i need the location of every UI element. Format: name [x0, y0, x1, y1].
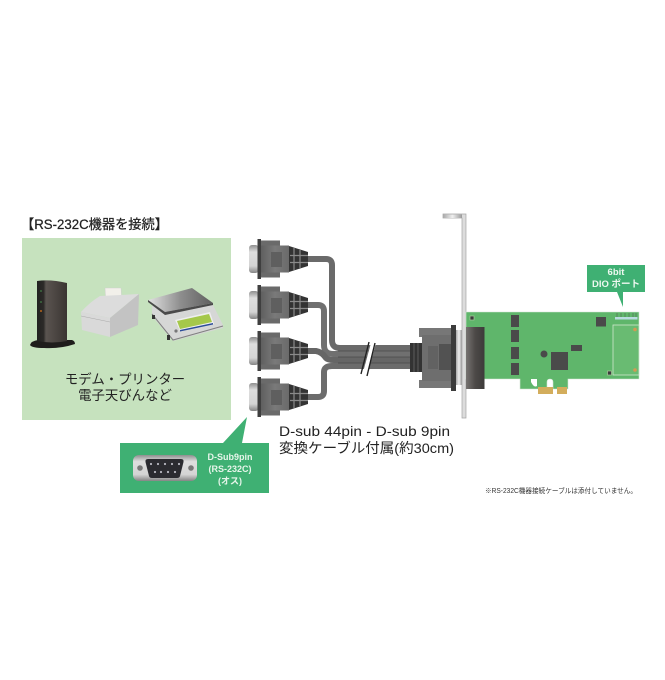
- icon: modem: [30, 280, 75, 348]
- note: ※RS-232C機器接続ケーブルは添付していません。: [485, 486, 637, 495]
- text: device names: [65, 371, 185, 403]
- callout: DIO port: DIO ポート: [592, 279, 640, 290]
- cables: [306, 259, 412, 397]
- text: cable description: [279, 423, 454, 456]
- text: cable description: D-sub 44pin - D-sub 9pin: [279, 423, 450, 439]
- connector: port 2: [249, 285, 308, 325]
- text: device names: 電子天びんなど: [78, 388, 172, 403]
- pcb board: [466, 312, 639, 394]
- cable break mark: [361, 342, 376, 376]
- small mounts: [470, 316, 612, 375]
- icon: D-sub connector: [133, 455, 197, 481]
- callout: D-Sub9pin: [120, 417, 269, 493]
- chips: [511, 315, 606, 375]
- black connector: [466, 327, 484, 389]
- connector: port 3: [249, 331, 308, 371]
- connector: port 1: [249, 239, 308, 279]
- DIO area: [613, 325, 639, 375]
- DIO header: [615, 317, 638, 320]
- callout: DIO port: [587, 265, 645, 307]
- text: cable description: 変換ケーブル付属(約30cm): [279, 440, 454, 456]
- connector: port 4: [249, 377, 308, 417]
- heading: RS-232C devices: 【RS-232C機器を接続】: [21, 216, 168, 232]
- callout: D-Sub9pin: D-Sub9pin: [208, 452, 252, 462]
- icon: weighing scale: [148, 288, 223, 341]
- gold fingers: [538, 387, 567, 394]
- icon: printer: [81, 288, 139, 337]
- bracket: [443, 214, 466, 418]
- callout: D-Sub9pin: (RS-232C): [208, 464, 252, 474]
- callout: DIO port: 6bit: [608, 267, 625, 278]
- text: device names: モデム・プリンター: [65, 371, 185, 387]
- connector: D-sub 44pin: [410, 325, 462, 391]
- panel: connected devices: [22, 238, 231, 420]
- callout: D-Sub9pin: (オス): [218, 476, 242, 486]
